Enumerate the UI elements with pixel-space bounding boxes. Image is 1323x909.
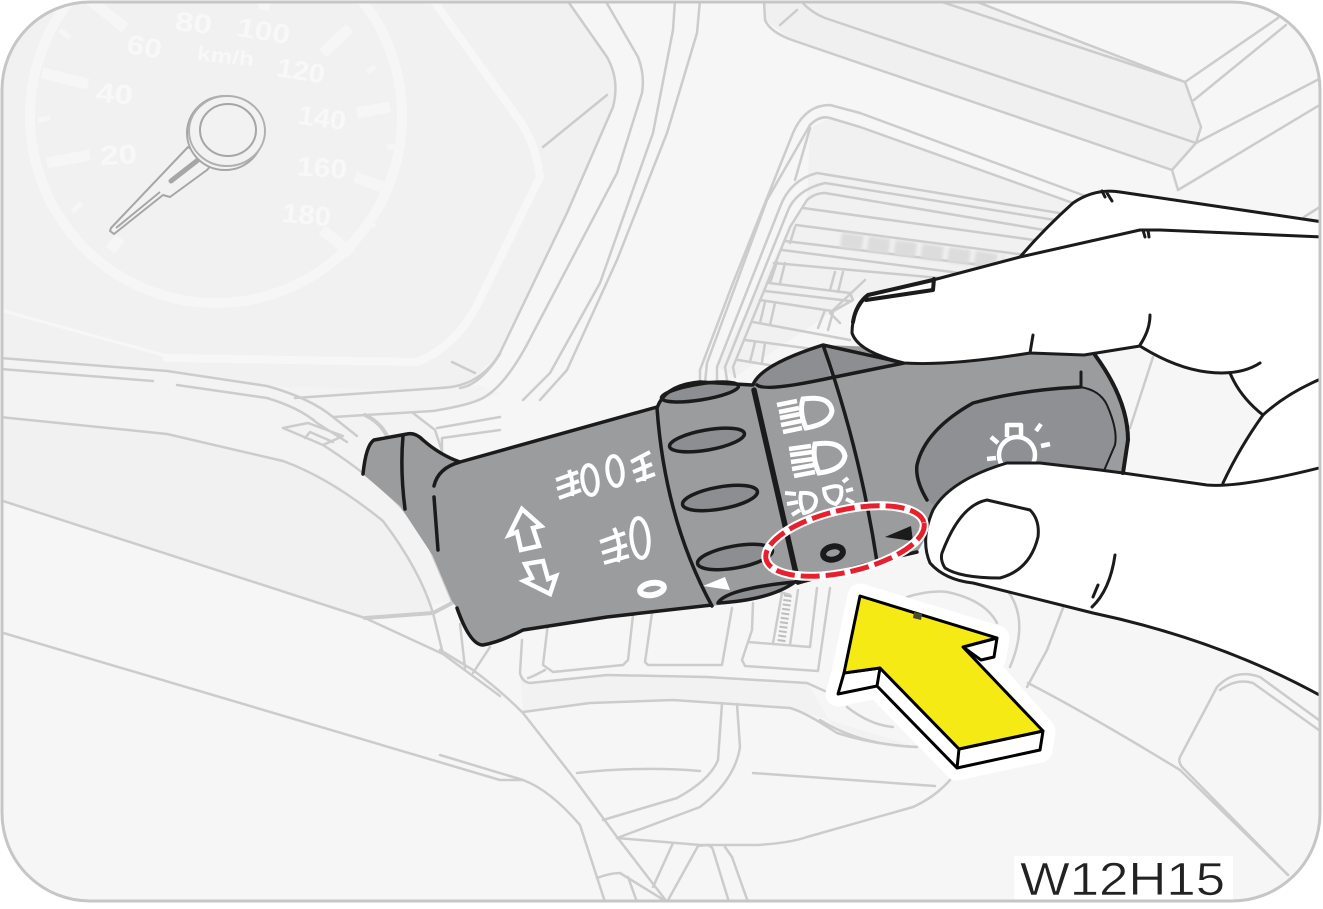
icon: white position marker [703,577,730,590]
speedometer dial: 160 [296,151,348,185]
speedometer dial: 100 [235,12,292,50]
icon: parking lamps [785,478,854,515]
stalk outline details [363,407,712,645]
switch body right edge [1095,355,1128,473]
stalk lever body [433,400,800,645]
icon: high beam [777,398,832,432]
speedometer dial: 20 [99,139,138,171]
fingernail on index finger [853,279,934,322]
right hand [852,191,1323,697]
thumbnail [941,500,1038,578]
stalk end cap [363,434,470,601]
hand silhouette [852,191,1323,697]
icon: headlamp symbol [987,424,1050,473]
icon: black position marker [885,526,913,541]
callout: dashed red ellipse around off position [759,493,931,589]
icon: low beam [789,443,845,476]
speedometer dial: 40 [95,78,134,110]
speedometer dial: 180 [281,198,332,232]
gap between the fingers [1097,346,1263,483]
main switch body [753,345,1128,583]
icon: front and rear fog lamps [556,452,655,498]
icon: off marker [822,545,844,561]
hand outline [852,191,1323,485]
figure code label: W12H15 [1020,853,1225,905]
speedometer dial: km/h [196,43,255,71]
speedometer dial: 60 [124,29,164,65]
speedometer dial: 80 [174,6,214,40]
speedometer dial: 140 [296,100,348,136]
arrow: yellow pointer [838,596,1043,768]
light stalk [363,345,1128,645]
rotary fog lamp ring [657,382,798,606]
icon: off position [639,581,665,597]
icon: key [110,96,265,234]
stalk symbols [509,398,913,597]
icon: turn signal up arrow [509,509,541,550]
speedometer dial [30,0,402,303]
gap line art [1130,205,1323,428]
headlamp button [917,387,1116,510]
icon: front fog lamp [600,517,651,563]
speedometer dial: 120 [275,52,327,90]
icon: turn signal down arrow [524,561,556,594]
